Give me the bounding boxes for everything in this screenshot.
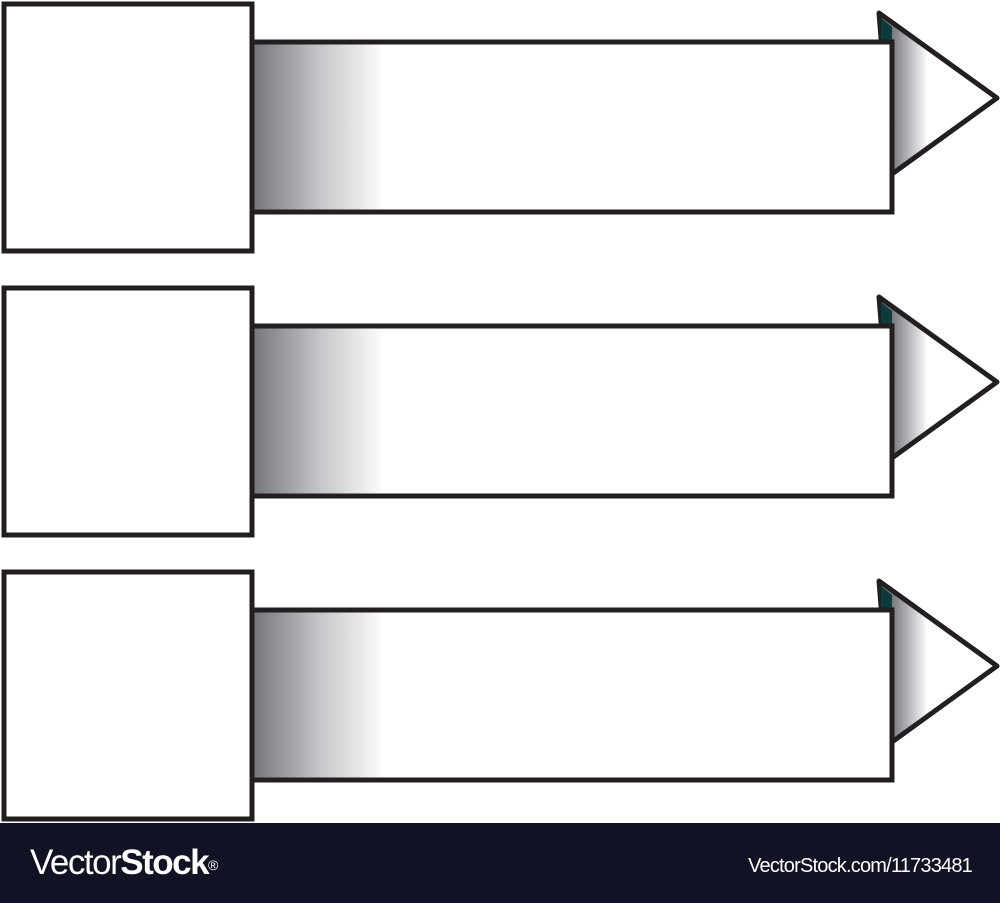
row 1 [4,4,997,251]
bar 1 [252,42,892,212]
row 2 [4,288,997,535]
arrowhead 1 [879,13,997,174]
arrowhead 3 [879,581,997,742]
square 3 [4,572,252,819]
square 2 [4,288,252,535]
bar 3 [252,610,892,780]
bar 2 [252,326,892,496]
square 1 [4,4,252,251]
url text: VectorStock.com/11733481 [748,855,972,877]
logo text: VectorStock® [30,843,217,882]
row 3 [4,572,997,819]
footer [0,823,1000,903]
arrowhead 2 [879,297,997,458]
